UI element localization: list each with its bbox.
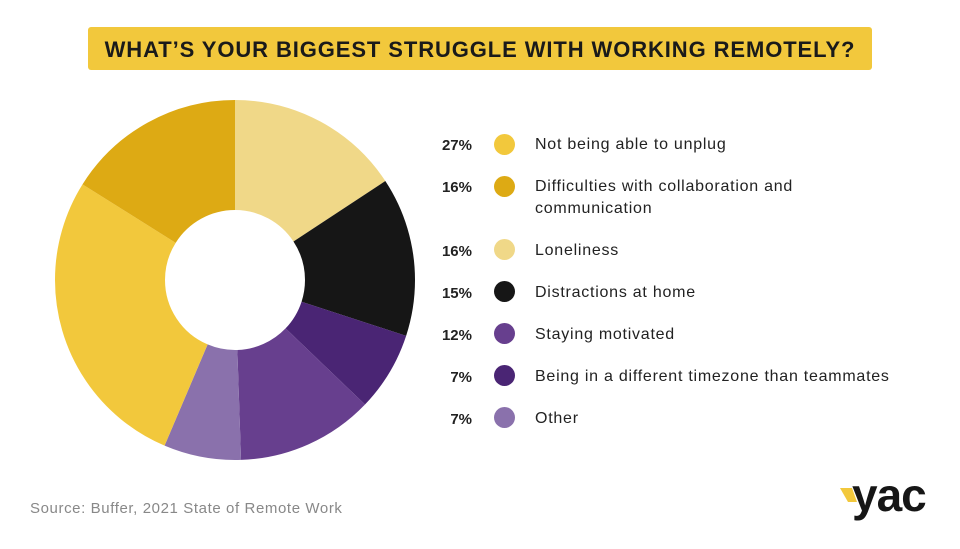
source note: Source: Buffer, 2021 State of Remote Work xyxy=(30,500,343,517)
legend: Distractions at home xyxy=(535,284,696,301)
legend: Staying motivated xyxy=(535,326,675,343)
legend: 16% xyxy=(442,243,472,260)
title banner: WHAT’S YOUR BIGGEST STRUGGLE WITH WORKING REMOTELY? xyxy=(105,37,855,62)
legend: 16% xyxy=(442,179,472,196)
legend xyxy=(442,134,890,428)
legend: 15% xyxy=(442,285,472,302)
legend: 12% xyxy=(442,327,472,344)
logo: yac xyxy=(852,469,926,521)
legend: Loneliness xyxy=(535,242,619,259)
legend: Being in a different timezone than teammates xyxy=(535,368,890,385)
legend: 7% xyxy=(450,369,472,386)
legend: 7% xyxy=(450,411,472,428)
legend: Other xyxy=(535,410,579,427)
donut chart xyxy=(55,100,415,460)
legend: communication xyxy=(535,200,652,217)
title banner xyxy=(88,27,872,70)
legend: 27% xyxy=(442,137,472,154)
legend: Not being able to unplug xyxy=(535,136,726,153)
legend: Difficulties with collaboration and xyxy=(535,178,793,195)
